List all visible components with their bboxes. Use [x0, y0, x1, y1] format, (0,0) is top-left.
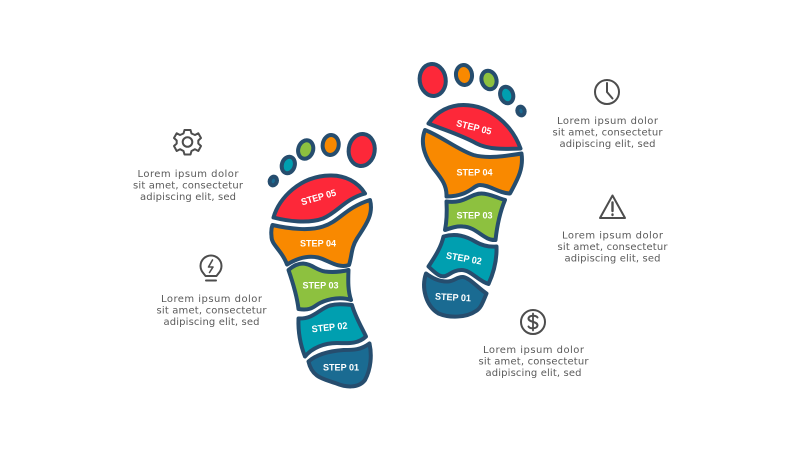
icon: dollar coin — [521, 310, 545, 334]
text block: warning: sit amet, consectetur — [558, 242, 668, 253]
left footprint — [269, 132, 377, 386]
text block: gear: adipiscing elit, sed — [140, 192, 236, 203]
right step 01: STEP 01 — [435, 292, 472, 304]
text block: clock — [552, 116, 663, 150]
text block: dollar: adipiscing elit, sed — [486, 368, 582, 379]
icon: light bulb — [200, 256, 222, 280]
left step 03 — [288, 264, 351, 309]
right step 05: STEP 05 — [455, 118, 493, 138]
text block: dollar: Lorem ipsum dolor — [483, 345, 585, 356]
text block: clock: adipiscing elit, sed — [560, 139, 656, 150]
icon: clock — [595, 80, 619, 104]
right footprint — [418, 62, 526, 317]
text block: warning: Lorem ipsum dolor — [562, 230, 664, 242]
text block: gear: sit amet, consectetur — [133, 180, 244, 192]
text block: bulb: Lorem ipsum dolor — [161, 294, 263, 305]
left step 05 — [274, 175, 365, 222]
left step 04: STEP 04 — [300, 238, 337, 250]
left step 05: STEP 05 — [300, 188, 338, 208]
text block: gear: Lorem ipsum dolor — [138, 169, 239, 180]
text block: gear — [133, 169, 244, 203]
left toes — [269, 132, 377, 186]
icon: gear — [174, 130, 201, 154]
left step 02: STEP 02 — [311, 321, 348, 335]
right step 03: STEP 03 — [456, 210, 492, 222]
text block: dollar — [478, 345, 589, 379]
right step 05 — [428, 105, 520, 149]
text block: bulb: sit amet, consectetur — [156, 306, 267, 316]
left step 01: STEP 01 — [323, 362, 360, 374]
text block: bulb — [156, 294, 267, 328]
text block: warning — [558, 230, 668, 264]
left step 04 — [271, 200, 371, 266]
left step 02 — [298, 304, 366, 356]
text block: dollar: sit amet, consectetur — [478, 356, 589, 368]
left step 01 — [308, 344, 371, 386]
right step 02 — [428, 235, 497, 284]
icon: warning triangle — [600, 196, 625, 218]
right step 04 — [423, 130, 522, 196]
text block: bulb: adipiscing elit, sed — [164, 317, 260, 328]
right step 03 — [445, 194, 505, 240]
text block: warning: adipiscing elit, sed — [564, 254, 660, 264]
text block: clock: sit amet, consectetur — [552, 128, 663, 138]
left step 03: STEP 03 — [302, 280, 338, 292]
right step 02: STEP 02 — [445, 250, 483, 268]
right step 01 — [424, 274, 486, 317]
right step 04: STEP 04 — [456, 168, 493, 178]
text block: clock: Lorem ipsum dolor — [557, 116, 659, 127]
right toes — [418, 62, 526, 116]
